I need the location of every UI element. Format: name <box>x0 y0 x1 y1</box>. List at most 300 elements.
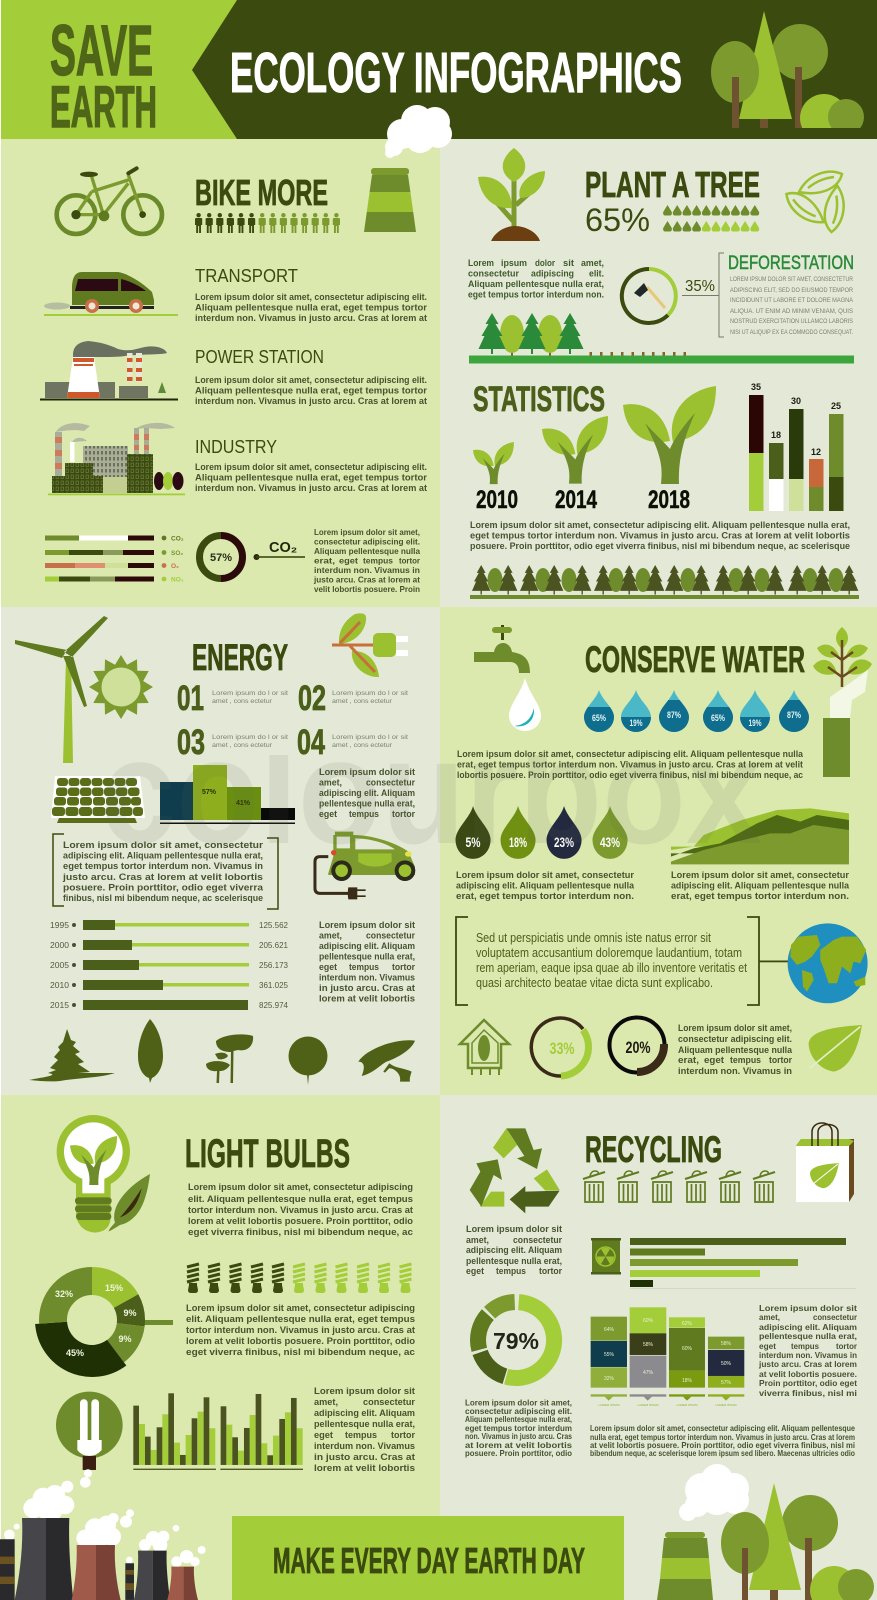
text: emissions body: eget <box>339 556 358 566</box>
text: bulbs paragraph 2: Lorem ipsum dolor sit amet, consectetur adipiscing <box>186 1303 415 1314</box>
illustration: sprouts by year: 2010 <box>476 486 518 514</box>
text: recycling paragraph 3 <box>758 1303 858 1398</box>
illustration: sprouts by year: 2018 <box>648 486 690 514</box>
illustration: sprouts by year: 2014 <box>555 486 597 514</box>
chart: ring 20%: 20% <box>626 1038 650 1057</box>
chart: emission bars with legend: SO₂ <box>171 550 183 557</box>
chart: ring 33% <box>531 1018 589 1076</box>
text: water closing: Lorem ipsum dolor sit amet, <box>678 1023 792 1034</box>
chart: stacked bars: 25 <box>831 401 841 411</box>
icon: plant in hand <box>813 627 872 777</box>
icon: wind turbine <box>15 616 108 763</box>
text: plant a tree body <box>468 258 604 300</box>
chart: yearly progress bars: 2000 <box>50 940 69 950</box>
list: numbered items: amet , cons ectetur <box>332 698 393 705</box>
heading: recycling: RECYCLING <box>585 1129 722 1170</box>
chart: yearly progress bars: 361.025 <box>259 980 288 990</box>
icon: eco bulb <box>57 1115 150 1233</box>
chart: stacked columns: 32% <box>604 1376 615 1382</box>
chart: yearly progress bars: 205.621 <box>259 940 288 950</box>
text: emissions body <box>313 527 421 594</box>
text: recycling paragraph 3: at velit lobortis posuere. <box>759 1369 857 1379</box>
text: energy paragraph 1: Lorem ipsum dolor sit <box>319 767 416 778</box>
text: recycling paragraph 3: Lorem ipsum dolor sit <box>759 1303 857 1313</box>
list: numbered items: amet , cons ectetur <box>212 698 273 705</box>
icon: recycle arrows <box>470 1128 560 1213</box>
text: recycling paragraph 3: consectetur <box>813 1312 858 1322</box>
chart: stacked columns: 60% <box>643 1318 654 1324</box>
text: power station body: Lorem ipsum dolor sit amet, consectetur adipiscing elit. <box>195 375 427 386</box>
chart: emission bars with legend: NO₂ <box>171 576 184 584</box>
icon: leaf plug <box>332 613 408 677</box>
heading: power station: POWER STATION <box>195 347 324 367</box>
chart: donut 79%: 79% <box>493 1328 539 1354</box>
text: plant a tree body: Aliquam pellentesque nulla erat, <box>468 279 604 290</box>
chart: stacked columns: 18% <box>682 1378 693 1384</box>
text: bulbs paragraph 1: lorem at velit lobortis posuere. Proin porttitor, odio <box>188 1216 413 1227</box>
chart: stacked columns: 57% <box>721 1380 732 1386</box>
text: emissions body: Aliquam pellentesque nulla <box>314 546 420 556</box>
chart: stacked bars: 35 <box>751 382 761 392</box>
drop 87% second <box>779 690 809 732</box>
text: bulbs paragraph 2: elit. Aliquam pellentesque nulla erat, eget tempus <box>186 1314 415 1325</box>
text: energy paragraph 2: eget <box>319 962 338 973</box>
chart: donut 79% <box>478 1302 554 1378</box>
icon: hazard barrel <box>591 1238 621 1274</box>
illustration: factories and smoke <box>0 1481 206 1600</box>
text: water closing: interdum non. Vivamus in <box>678 1066 792 1077</box>
text: bulbs paragraph 1: Lorem ipsum dolor sit amet, consectetur adipiscing <box>188 1182 413 1193</box>
chart: emission bars with legend: O₂ <box>171 563 179 570</box>
list: numbered items: amet , cons ectetur <box>332 742 393 749</box>
text: energy paragraph 2: in justo arcu. Cras at <box>319 983 416 994</box>
text: statistics body: Lorem ipsum dolor sit amet, consectetur adipiscing elit. Aliquam pellentesque nulla erat, <box>470 520 850 531</box>
callout: quotation in brackets: rem aperiam, eaque ipsa quae ab illo inventore veritatis et <box>476 961 747 975</box>
text: deforestation body: NOSTRUD EXERCITATION ULLAMCO LABORIS <box>730 319 853 325</box>
text: bulbs paragraph 3: consectetur <box>363 1397 415 1408</box>
callout: bracketed text: finibus, nisl mi bibendum neque, ac scelerisque <box>63 893 263 904</box>
chart: axe ring 35%: 35% <box>685 278 715 295</box>
chart: donut segments: 9% <box>118 1334 132 1344</box>
chart: donut segments: 45% <box>66 1348 84 1358</box>
icon row: people <box>195 213 340 233</box>
chart: yearly progress bars: 256.173 <box>259 960 288 970</box>
text: recycling paragraph 3: amet, <box>759 1312 780 1322</box>
list: numbered items: 03 <box>177 723 205 762</box>
text: energy paragraph 2: adipiscing elit. Aliquam <box>319 941 415 952</box>
icon: leaf <box>809 1025 862 1072</box>
text: bulbs paragraph 3: tortor <box>391 1430 415 1441</box>
text: water closing <box>678 1023 793 1077</box>
text: water body: lobortis posuere. Proin porttitor, odio eget viverra finibus, nisl mi bibendum neque, ac <box>457 770 803 781</box>
callout: bracketed text: posuere. Proin porttitor, odio eget viverra <box>63 882 264 894</box>
text: recycling paragraph 4: at velit lobortis posuere. Proin porttitor, odio eget viverra finibus, nisl mi <box>590 1440 855 1450</box>
text: deforestation body: ALIQUA. UT ENIM AD MINIM VENIAM, QUIS <box>730 309 853 315</box>
icon row: spiral bulbs <box>187 1264 412 1293</box>
text: industry body: Lorem ipsum dolor sit amet, consectetur adipiscing elit. <box>195 462 427 473</box>
chart: stacked columns: 60% <box>682 1346 693 1352</box>
drop 65% second: 65% <box>711 713 725 723</box>
panel: energy <box>1 607 440 1095</box>
heading: bike more: BIKE MORE <box>195 172 328 213</box>
chart: yearly progress bars: 2010 <box>50 980 69 990</box>
icon row: trash cans <box>583 1171 775 1202</box>
icon: smokestack <box>364 168 416 232</box>
chart: large percentage drops: 43% <box>600 834 620 850</box>
chart: energy bars: 41% <box>236 800 251 807</box>
drop 19% <box>621 690 651 732</box>
chart: stacked bars: 30 <box>791 396 801 406</box>
text: recycling paragraph 3: Proin porttitor, odio eget <box>759 1378 857 1388</box>
text: transport body: Lorem ipsum dolor sit amet, consectetur adipiscing elit. <box>195 292 427 303</box>
icon: shopping bag <box>796 1123 854 1202</box>
chart: stacked bars: 18 <box>771 430 781 440</box>
text: energy paragraph 2: amet, <box>319 930 342 942</box>
chart: CO2 donut 57% <box>200 536 305 578</box>
text: bulbs paragraph 3: eget <box>314 1430 334 1441</box>
text: energy paragraph 1: tempus <box>349 809 379 820</box>
illustration: power station <box>40 341 178 400</box>
text: recycling paragraph 1: tempus <box>496 1266 526 1277</box>
chart: area <box>671 808 849 864</box>
drop 65% second <box>703 690 733 732</box>
list: numbered items <box>177 679 408 762</box>
chart: axe ring 35% <box>622 253 724 337</box>
text: recycling paragraph 1: pellentesque nulla erat, <box>466 1256 562 1267</box>
chart: donut segments: 15% <box>105 1283 123 1293</box>
text: statistics body <box>470 520 850 552</box>
chart: stacked columns: 64% <box>604 1327 615 1333</box>
illustration: bottom smokestack <box>657 1532 713 1600</box>
list: numbered items: Lorem ipsum do l or sit <box>332 690 408 697</box>
text: bulbs paragraph 3: pellentesque nulla erat, <box>314 1419 415 1430</box>
panel: conserve water <box>440 607 877 1095</box>
text: bulbs paragraph 2: lorem at velit lobortis posuere. Proin porttitor, odio <box>186 1336 415 1347</box>
callout: bracketed text: justo arcu. Cras at lorem at velit lobortis <box>62 872 263 883</box>
text: bulbs paragraph 1: tortor interdum non. Vivamus in justo arcu. Cras at <box>188 1205 414 1216</box>
text: power station body: Aliquam pellentesque nulla erat, eget tempus tortor <box>195 386 427 396</box>
text: energy paragraph 2: pellentesque nulla erat, <box>319 952 415 962</box>
text: emissions body: Lorem ipsum dolor sit amet, <box>314 527 420 537</box>
chart: stacked columns: 47% <box>643 1370 654 1376</box>
chart: emission bars with legend <box>45 536 184 584</box>
text: right water caption: Lorem ipsum dolor sit amet, consectetur <box>671 870 849 881</box>
text: energy paragraph 1 <box>319 767 416 820</box>
drop 19% second: 19% <box>748 718 762 728</box>
text: emissions body: consectetur adipiscing elit. <box>314 536 420 546</box>
text: recycling paragraph 3: tempus <box>791 1341 819 1351</box>
text: bulbs paragraph 3: lorem at velit lobortis <box>314 1463 415 1474</box>
text: energy paragraph 2: tortor <box>392 962 415 973</box>
heading: transport: TRANSPORT <box>195 266 298 286</box>
icon: eco house <box>460 1020 509 1075</box>
text: water body: Lorem ipsum dolor sit amet, consectetur adipiscing elit. Aliquam pellentesque nulla <box>457 749 804 760</box>
text: water closing: tempus <box>730 1055 761 1066</box>
chart: large percentage drops: 23% <box>554 834 574 850</box>
text: bulbs paragraph 3: tempus <box>345 1430 377 1441</box>
text: emissions body: tortor <box>399 556 421 566</box>
heading: energy: ENERGY <box>192 637 288 678</box>
text: industry body <box>195 462 428 494</box>
icon: seedling <box>478 148 545 241</box>
text: energy paragraph 2: consectetur <box>366 930 415 942</box>
panel: light bulbs <box>0 1095 440 1600</box>
text: bulbs paragraph 3: Lorem ipsum dolor sit <box>314 1386 416 1397</box>
callout: quotation in brackets <box>456 917 789 1005</box>
text: recycling paragraph 1: amet, <box>466 1235 489 1246</box>
chart: CO2 donut 57%: 57% <box>210 552 232 564</box>
chart: CO2 donut 57%: CO₂ <box>269 540 297 556</box>
text: statistics body: posuere. Proin porttitor, odio eget viverra finibus, nisl mi bibendum neque, ac scelerisque <box>470 541 850 552</box>
chart: donut segments: 9% <box>123 1308 137 1318</box>
icon: electric car <box>315 832 415 899</box>
callout: quotation in brackets: voluptatem accusantium doloremque laudantium, totam <box>476 946 742 960</box>
text: bulbs paragraph 3: in justo arcu. Cras at <box>314 1452 416 1463</box>
chart: stacked columns: LOREM IPSUM <box>598 1403 620 1407</box>
chart: stacked columns: 58% <box>721 1341 732 1347</box>
icon: bicycle <box>57 168 162 234</box>
callout: bracketed text: Lorem ipsum dolor sit amet, consectetur <box>63 840 263 851</box>
text: left water caption <box>456 870 635 902</box>
text: recycling paragraph 2: non. Vivamus in justo arcu. Cras <box>465 1431 572 1441</box>
heading: plant a tree: PLANT A TREE <box>585 164 760 205</box>
text: recycling paragraph 3: interdum non. Vivamus in <box>759 1350 857 1360</box>
illustration: forest and stumps <box>469 313 854 364</box>
text: energy paragraph 1: amet, <box>319 778 342 788</box>
text: deforestation body: NISI UT ALIQUIP EX EA COMMODO CONSEQUAT. <box>730 330 853 336</box>
list: numbered items: Lorem ipsum do l or sit <box>212 734 288 741</box>
text: bulbs paragraph 3: adipiscing elit. Aliquam <box>314 1408 415 1419</box>
chart: stacked columns: LOREM IPSUM <box>676 1403 698 1407</box>
heading: light bulbs: LIGHT BULBS <box>185 1132 350 1176</box>
chart: ring 33%: 33% <box>550 1039 574 1058</box>
text: bulbs paragraph 2: eget viverra finibus, nisl mi bibendum neque, ac <box>186 1347 415 1358</box>
chart: stacked columns: LOREM IPSUM <box>715 1403 737 1407</box>
chart: stacked columns: LOREM IPSUM <box>637 1403 659 1407</box>
chart: yearly progress bars: 2005 <box>50 960 69 970</box>
text: recycling paragraph 3: viverra finibus, nisl mi <box>759 1388 857 1398</box>
banner: make every day earth day <box>232 1516 624 1600</box>
text: deforestation body: INCIDIDUNT UT LABORE ET DOLORE MAGNA <box>730 298 853 304</box>
text: plant a tree body: adipiscing <box>531 268 574 280</box>
text: water closing: tortor <box>769 1055 792 1066</box>
text: recycling paragraph 2: posuere. Proin porttitor, odio <box>465 1448 572 1458</box>
text: bulbs paragraph 1 <box>188 1182 414 1238</box>
illustration: van <box>44 272 178 316</box>
text: energy paragraph 2: lorem at velit lobortis <box>319 994 415 1004</box>
text: recycling paragraph 1: eget <box>466 1266 485 1277</box>
text: bulbs paragraph 2: tortor interdum non. Vivamus in justo arcu. Cras at <box>186 1325 416 1336</box>
chart: emission bars with legend: CO₂ <box>171 536 184 542</box>
chart: donut segments <box>51 1281 173 1361</box>
icon: sun <box>89 655 153 719</box>
text: transport body <box>195 292 428 324</box>
chart: energy bars: 57% <box>202 789 217 796</box>
chart: large percentage drops <box>456 806 628 859</box>
drop 19%: 19% <box>630 718 642 728</box>
text: plant a tree body: amet, <box>581 258 604 269</box>
text: recycling paragraph 2: at lorem at velit lobortis <box>465 1440 572 1450</box>
text: deforestation body: ADIPISCING ELIT, SED DO EIUSMOD TEMPOR <box>730 288 854 294</box>
text: bulbs paragraph 1: eget viverra finibus, nisl mi bibendum neque, ac <box>188 1227 413 1238</box>
chart: yearly progress bars: 125.562 <box>259 920 288 930</box>
text: recycling paragraph 3: eget <box>759 1341 776 1351</box>
chart: twin bar groups <box>133 1393 303 1470</box>
text: water body <box>457 749 804 781</box>
chart: stacked columns: 58% <box>643 1342 654 1348</box>
text: deforestation body <box>730 277 854 336</box>
text: energy paragraph 2: interdum non. Vivamus <box>319 972 415 984</box>
text: emissions body: velit lobortis posuere. Proin <box>314 584 420 594</box>
list: numbered items: 02 <box>298 679 326 718</box>
list: numbered items: 04 <box>297 723 325 762</box>
text: recycling paragraph 2: Aliquam pellentesque nulla erat, <box>465 1414 572 1424</box>
text: recycling paragraph 1: tortor <box>539 1266 562 1277</box>
stat: 65%: 65% <box>585 202 650 238</box>
text: deforestation body: LOREM IPSUM DOLOR SIT AMET, CONSECTETUR <box>730 277 854 283</box>
text: water closing: consectetur adipiscing elit. <box>678 1034 792 1045</box>
icon: globe <box>788 923 868 1003</box>
drop 19% second <box>740 690 770 732</box>
drop 65%: 65% <box>592 713 606 723</box>
text: energy paragraph 1: pellentesque nulla erat, <box>319 798 415 810</box>
chart: yearly progress bars <box>50 920 288 1010</box>
title: save earth <box>50 12 157 140</box>
text: right water caption <box>671 870 850 902</box>
text: recycling paragraph 3: pellentesque nulla erat, <box>759 1331 857 1341</box>
banner: make every day earth day: MAKE EVERY DAY EARTH DAY <box>273 1540 585 1581</box>
text: plant a tree body: Lorem <box>468 258 494 269</box>
text: bulbs paragraph 3: amet, <box>314 1397 338 1408</box>
icon grid: small trees <box>663 205 759 232</box>
chart: large percentage drops: 5% <box>466 834 481 850</box>
text: left water caption: erat, eget tempus tortor interdum non. <box>456 891 634 902</box>
chart: stacked columns: 50% <box>721 1361 732 1367</box>
icon: faucet <box>474 625 530 673</box>
text: plant a tree body: elit. <box>589 268 604 280</box>
illustration: trees <box>711 11 864 128</box>
text: energy paragraph 2 <box>319 920 416 1004</box>
heading: industry: INDUSTRY <box>195 437 277 457</box>
chart: donut segments: 32% <box>55 1289 73 1299</box>
text: plant a tree body: dolor <box>535 258 555 269</box>
panel: recycling <box>440 1095 877 1600</box>
text: transport body: interdum non. Vivamus in justo arcu. Cras at lorem at <box>195 313 428 324</box>
text: bulbs paragraph 2 <box>186 1303 416 1358</box>
text: plant a tree body: sit <box>563 258 575 269</box>
text: energy paragraph 2: tempus <box>349 962 379 973</box>
title: save earth: SAVE <box>50 12 153 91</box>
text: recycling paragraph 1 <box>466 1224 563 1277</box>
title: save earth: EARTH <box>50 75 157 140</box>
text: emissions body: tempus <box>363 556 393 566</box>
text: recycling paragraph 3: tortor <box>836 1341 858 1351</box>
drop 87% <box>659 690 689 732</box>
illustration: tree line <box>470 565 859 599</box>
text: power station body: interdum non. Vivamus in justo arcu. Cras at lorem at <box>195 396 428 407</box>
chart: large percentage drops: 18% <box>509 834 527 850</box>
text: energy paragraph 1: eget <box>319 809 338 820</box>
drop 87%: 87% <box>667 710 681 720</box>
callout: bracketed text: adipiscing elit. Aliquam pellentesque nulla erat, <box>63 850 263 862</box>
text: recycling paragraph 3: adipiscing elit. Aliquam <box>759 1322 857 1332</box>
icon: bottom cloud <box>679 1464 749 1521</box>
text: emissions body: justo arcu. Cras at lorem at <box>313 574 420 584</box>
text: water closing: erat, <box>678 1055 699 1066</box>
illustration: sprouts by year <box>473 386 716 514</box>
chart: yearly progress bars: 825.974 <box>259 1000 288 1010</box>
list: numbered items: amet , cons ectetur <box>212 742 273 749</box>
chart: yearly progress bars: 2015 <box>50 1000 69 1010</box>
text: emissions body: erat, <box>314 556 335 566</box>
text: bulbs paragraph 1: elit. Aliquam pellentesque nulla erat, eget tempus <box>188 1194 413 1205</box>
text: left water caption: Lorem ipsum dolor sit amet, consectetur <box>456 870 634 881</box>
text: right water caption: adipiscing elit. Aliquam pellentesque nulla <box>671 880 850 892</box>
chart: energy bars <box>160 765 295 824</box>
chart: stacked columns: 55% <box>604 1352 615 1358</box>
callout: bracketed text <box>53 834 278 909</box>
icons: tree silhouettes <box>29 1019 415 1085</box>
text: energy paragraph 2: Lorem ipsum dolor sit <box>319 920 416 931</box>
panel: plant a tree and statistics <box>440 139 877 607</box>
text: recycling paragraph 3: justo arcu. Cras at lorem <box>758 1359 857 1369</box>
icon: CFL bulb in circle <box>56 1392 123 1488</box>
callout: bracketed text: eget tempus tortor interdum non. Vivamus in <box>63 861 263 872</box>
chart: stacked columns <box>591 1307 744 1407</box>
text: energy paragraph 1: tortor <box>392 809 415 820</box>
text: bulbs paragraph 3 <box>314 1386 416 1474</box>
text: industry body: Aliquam pellentesque nulla erat, eget tempus tortor <box>195 472 427 484</box>
text: bulbs paragraph 3: interdum non. Vivamus <box>314 1441 415 1452</box>
icon: cloud <box>385 105 452 158</box>
text: recycling paragraph 2: eget tempus tortor interdum <box>465 1423 572 1433</box>
illustration: bottom trees <box>721 1483 874 1600</box>
chart: horizontal bars <box>630 1238 856 1289</box>
text: recycling paragraph 2: Lorem ipsum dolor sit amet, <box>465 1398 572 1408</box>
text: recycling paragraph 1: Lorem ipsum dolor sit <box>466 1224 563 1235</box>
chart: stacked bars: 12 <box>811 447 821 457</box>
text: industry body: interdum non. Vivamus in justo arcu. Cras at lorem at <box>195 483 428 494</box>
text: recycling paragraph 2: consectetur adipiscing elit. <box>465 1406 572 1416</box>
watermark: colourbox <box>100 707 762 875</box>
chart: stacked columns: 62% <box>682 1321 693 1327</box>
chart: ring 20% <box>610 1018 664 1072</box>
list: numbered items: Lorem ipsum do l or sit <box>212 690 288 697</box>
illustration: industry <box>48 423 185 495</box>
text: recycling paragraph 2 <box>465 1398 572 1458</box>
text: recycling paragraph 1: consectetur <box>513 1235 562 1246</box>
text: water body: erat, eget tempus tortor interdum non. Vivamus in justo arcu. Cras at lorem at velit <box>457 760 804 770</box>
list: numbered items: Lorem ipsum do l or sit <box>332 734 408 741</box>
icon: recycling leaves <box>785 172 855 233</box>
text: power station body <box>195 375 428 407</box>
callout: quotation in brackets: quasi architecto beatae vitae dicta sunt explicabo. <box>476 976 713 990</box>
list: numbered items: 01 <box>177 679 204 718</box>
text: plant a tree body: consectetur <box>468 268 519 280</box>
icon: solar panel <box>51 776 145 823</box>
text: emissions body: interdum non. Vivamus in <box>314 565 420 575</box>
drop 87% second: 87% <box>787 710 801 720</box>
heading: statistics: STATISTICS <box>473 380 605 419</box>
text: recycling paragraph 4 <box>590 1423 855 1458</box>
chart: stacked bars <box>749 382 844 511</box>
text: left water caption: adipiscing elit. Aliquam pellentesque nulla <box>456 880 635 892</box>
icon: water drop <box>509 678 541 731</box>
panel: transport and emissions <box>1 139 440 607</box>
callout: quotation in brackets: Sed ut perspiciatis unde omnis iste natus error sit <box>476 931 711 945</box>
text: plant a tree body: eget tempus tortor interdum non. <box>468 290 604 300</box>
text: energy paragraph 1: consectetur <box>366 778 415 788</box>
